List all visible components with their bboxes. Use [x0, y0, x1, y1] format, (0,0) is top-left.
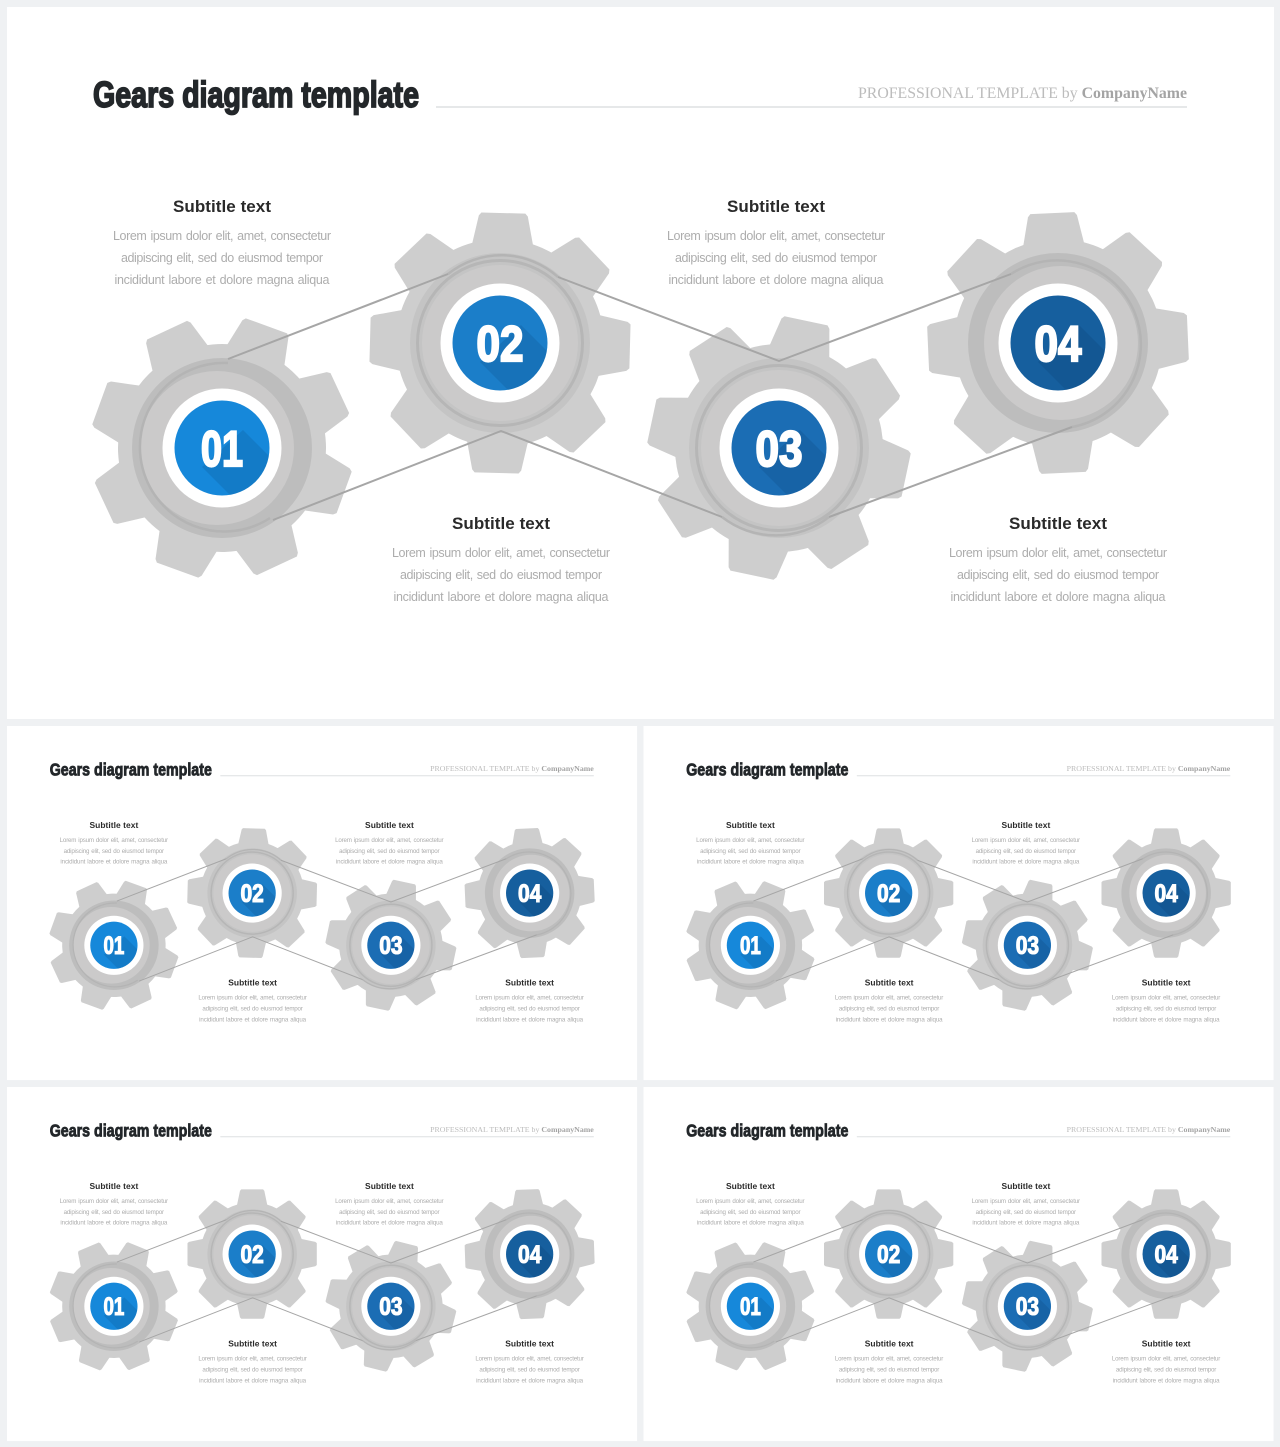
gear 01 [666, 1222, 835, 1390]
text block 4: Subtitle text [1142, 1339, 1191, 1349]
gear 01 [30, 1222, 198, 1390]
text block 3: Subtitle text [727, 197, 825, 216]
text block 4: Subtitle text [1009, 514, 1107, 533]
header tagline: PROFESSIONAL TEMPLATE by CompanyName [858, 85, 1187, 102]
text block 2: Lorem ipsum dolor elit, amet, consectetur [392, 546, 610, 560]
text block 2 [198, 1339, 307, 1384]
text block 3: incididunt labore et dolore magna aliqua [972, 1220, 1080, 1227]
text block 3: incididunt labore et dolore magna aliqua [972, 859, 1080, 866]
gear 04 [1101, 828, 1231, 958]
text block 2: incididunt labore et dolore magna aliqua [836, 1016, 943, 1023]
title: Gears diagram template [686, 1121, 848, 1141]
text block 3 [667, 197, 885, 287]
gear 03 [951, 869, 1104, 1022]
gear 04: 04 [518, 1241, 541, 1269]
text block 2: Lorem ipsum dolor elit, amet, consectetur [835, 1355, 943, 1362]
text block 3: adipiscing elit, sed do eiusmod tempor [976, 848, 1076, 855]
gear 03: 03 [379, 1293, 403, 1321]
belt line [73, 849, 571, 989]
gear 04: 04 [518, 880, 541, 908]
gear 02 [824, 828, 953, 958]
text block 4: Lorem ipsum dolor elit, amet, consectetur [475, 994, 584, 1001]
title: Gears diagram template [50, 760, 212, 780]
text block 4: adipiscing elit, sed do eiusmod tempor [479, 1005, 580, 1012]
text block 1: Subtitle text [726, 820, 775, 830]
text block 1 [113, 197, 331, 287]
gear 02 [186, 827, 318, 959]
gear 02: 02 [476, 316, 524, 372]
gear 02: 02 [877, 880, 900, 908]
text block 2: Subtitle text [228, 978, 277, 988]
text block 4: incididunt labore et dolore magna aliqua [476, 1377, 584, 1384]
header tagline: PROFESSIONAL TEMPLATE by CompanyName [1067, 1125, 1231, 1134]
text block 3: Lorem ipsum dolor elit, amet, consectetur [335, 1198, 444, 1205]
gear 04: 04 [1034, 316, 1082, 372]
header tagline: PROFESSIONAL TEMPLATE by CompanyName [430, 764, 594, 773]
text block 3: Lorem ipsum dolor elit, amet, consectetur [972, 837, 1080, 844]
gear 01 [31, 862, 197, 1028]
panel: small slide bottom left [7, 1087, 637, 1441]
text block 1: Subtitle text [726, 1181, 775, 1191]
title: Gears diagram template [50, 1121, 212, 1141]
text block 3 [972, 1181, 1080, 1227]
text block 2: Subtitle text [452, 514, 550, 533]
text block 1: Subtitle text [90, 1181, 138, 1191]
text block 4 [1112, 1339, 1220, 1384]
panel: small slide top right [643, 726, 1274, 1080]
gear 02: 02 [240, 880, 264, 908]
panel: main slide [7, 7, 1274, 719]
gear 04: 04 [1154, 880, 1178, 908]
text block 2: incididunt labore et dolore magna aliqua [199, 1016, 307, 1023]
text block 2: incididunt labore et dolore magna aliqua [836, 1377, 943, 1384]
text block 4: Subtitle text [505, 978, 554, 988]
title: Gears diagram template [93, 74, 419, 115]
text block 3: Lorem ipsum dolor elit, amet, consectetur [335, 837, 444, 844]
gear 02 [824, 1189, 953, 1319]
text block 3: adipiscing elit, sed do eiusmod tempor [339, 1209, 440, 1216]
text block 2 [198, 978, 307, 1023]
text block 2: Subtitle text [865, 978, 914, 988]
gear 02: 02 [240, 1241, 264, 1269]
text block 2 [835, 1339, 943, 1384]
text block 1: Subtitle text [173, 197, 271, 216]
text block 1 [60, 820, 168, 866]
gear 04: 04 [1154, 1241, 1178, 1269]
text block 4: Lorem ipsum dolor elit, amet, consectetur [949, 546, 1167, 560]
text block 4: incididunt labore et dolore magna aliqua [1113, 1377, 1220, 1384]
gear 02 [367, 210, 633, 476]
text block 1: adipiscing elit, sed do eiusmod tempor [64, 1209, 164, 1216]
gear 03 [625, 294, 933, 602]
text block 4: incididunt labore et dolore magna aliqua [950, 590, 1166, 604]
gear 01: 01 [103, 932, 124, 960]
text block 3: adipiscing elit, sed do eiusmod tempor [339, 848, 440, 855]
text block 1: Lorem ipsum dolor elit, amet, consectetur [60, 1198, 168, 1205]
text block 1: adipiscing elit, sed do eiusmod tempor [700, 1209, 801, 1216]
text block 2: Lorem ipsum dolor elit, amet, consectetur [835, 994, 943, 1001]
gear 01 [55, 281, 389, 615]
text block 4 [475, 978, 584, 1023]
text block 2 [835, 978, 943, 1023]
gear 03: 03 [1016, 932, 1039, 960]
text block 3: adipiscing elit, sed do eiusmod tempor [976, 1209, 1076, 1216]
text block 2: Subtitle text [228, 1339, 277, 1349]
text block 3: Subtitle text [1002, 820, 1050, 830]
text block 2: adipiscing elit, sed do eiusmod tempor [400, 568, 602, 582]
text block 2: adipiscing elit, sed do eiusmod tempor [839, 1366, 939, 1373]
text block 2: incididunt labore et dolore magna aliqua [199, 1377, 307, 1384]
belt line [140, 255, 1141, 535]
belt line [73, 1210, 571, 1350]
gear 03 [951, 1230, 1104, 1383]
text block 2: Subtitle text [865, 1339, 914, 1349]
text block 1: incididunt labore et dolore magna aliqua [114, 273, 330, 287]
text block 4: adipiscing elit, sed do eiusmod tempor [957, 568, 1159, 582]
text block 2: Lorem ipsum dolor elit, amet, consectetur [198, 994, 307, 1001]
text block 1: incididunt labore et dolore magna aliqua [60, 1220, 168, 1227]
text block 2: adipiscing elit, sed do eiusmod tempor [839, 1005, 939, 1012]
gear 04 [463, 1187, 597, 1321]
text block 1: Lorem ipsum dolor elit, amet, consectetur [696, 837, 805, 844]
panel: small slide top left [7, 726, 637, 1080]
gear 01: 01 [201, 421, 243, 477]
text block 4 [1112, 978, 1220, 1023]
text block 4: Subtitle text [505, 1339, 554, 1349]
text block 4: adipiscing elit, sed do eiusmod tempor [479, 1366, 580, 1373]
header tagline: PROFESSIONAL TEMPLATE by CompanyName [430, 1125, 594, 1134]
text block 1: adipiscing elit, sed do eiusmod tempor [700, 848, 801, 855]
text block 3: Subtitle text [1002, 1181, 1050, 1191]
gear 02: 02 [877, 1241, 900, 1269]
text block 4: incididunt labore et dolore magna aliqua [476, 1016, 584, 1023]
gear 01: 01 [740, 932, 761, 960]
text block 2: adipiscing elit, sed do eiusmod tempor [202, 1005, 303, 1012]
text block 3: Lorem ipsum dolor elit, amet, consectetur [667, 229, 885, 243]
text block 1: Subtitle text [90, 820, 138, 830]
text block 3: adipiscing elit, sed do eiusmod tempor [675, 251, 877, 265]
gear 01 [666, 861, 835, 1029]
text block 3 [335, 820, 444, 866]
gear 03: 03 [756, 421, 802, 477]
gear 04 [462, 826, 597, 960]
text block 1: incididunt labore et dolore magna aliqua [60, 859, 168, 866]
gear 04 [922, 207, 1194, 479]
gear 01: 01 [740, 1293, 761, 1321]
gear 03: 03 [379, 932, 403, 960]
text block 3: Subtitle text [365, 1181, 414, 1191]
text block 1: Lorem ipsum dolor elit, amet, consectetur [696, 1198, 805, 1205]
gear 03 [313, 1228, 469, 1385]
text block 1: Lorem ipsum dolor elit, amet, consectetur [113, 229, 331, 243]
text block 1 [696, 1181, 805, 1227]
header tagline: PROFESSIONAL TEMPLATE by CompanyName [1067, 764, 1231, 773]
text block 2: Lorem ipsum dolor elit, amet, consectetur [198, 1355, 307, 1362]
title: Gears diagram template [686, 760, 848, 780]
text block 3: incididunt labore et dolore magna aliqua [668, 273, 884, 287]
text block 4: Lorem ipsum dolor elit, amet, consectetur [1112, 994, 1220, 1001]
gear 02 [188, 1189, 317, 1319]
gear 03: 03 [1016, 1293, 1039, 1321]
text block 1: Lorem ipsum dolor elit, amet, consectetur [60, 837, 168, 844]
text block 4: Subtitle text [1142, 978, 1191, 988]
text block 3: incididunt labore et dolore magna aliqua [336, 1220, 443, 1227]
text block 4: incididunt labore et dolore magna aliqua [1113, 1016, 1220, 1023]
text block 1: adipiscing elit, sed do eiusmod tempor [64, 848, 164, 855]
gear 01: 01 [103, 1293, 124, 1321]
belt line [710, 849, 1207, 989]
text block 1: incididunt labore et dolore magna aliqua [697, 1220, 804, 1227]
text block 2: incididunt labore et dolore magna aliqua [394, 590, 609, 604]
text block 4: adipiscing elit, sed do eiusmod tempor [1116, 1366, 1216, 1373]
text block 3 [972, 820, 1080, 866]
text block 4: Lorem ipsum dolor elit, amet, consectetur [475, 1355, 584, 1362]
text block 1 [696, 820, 805, 866]
text block 1 [60, 1181, 168, 1227]
text block 3: incididunt labore et dolore magna aliqua [336, 859, 443, 866]
text block 4 [475, 1339, 584, 1384]
text block 1: adipiscing elit, sed do eiusmod tempor [121, 251, 323, 265]
text block 2 [392, 514, 610, 604]
belt line [710, 1210, 1207, 1350]
text block 4: Lorem ipsum dolor elit, amet, consectetur [1112, 1355, 1220, 1362]
text block 3: Lorem ipsum dolor elit, amet, consectetur [972, 1198, 1080, 1205]
text block 4 [949, 514, 1167, 604]
panel: small slide bottom right [643, 1087, 1274, 1441]
gear 03 [314, 869, 468, 1022]
gear 04 [1101, 1189, 1231, 1319]
text block 1: incididunt labore et dolore magna aliqua [697, 859, 804, 866]
text block 2: adipiscing elit, sed do eiusmod tempor [202, 1366, 303, 1373]
text block 3 [335, 1181, 444, 1227]
text block 4: adipiscing elit, sed do eiusmod tempor [1116, 1005, 1216, 1012]
text block 3: Subtitle text [365, 820, 414, 830]
